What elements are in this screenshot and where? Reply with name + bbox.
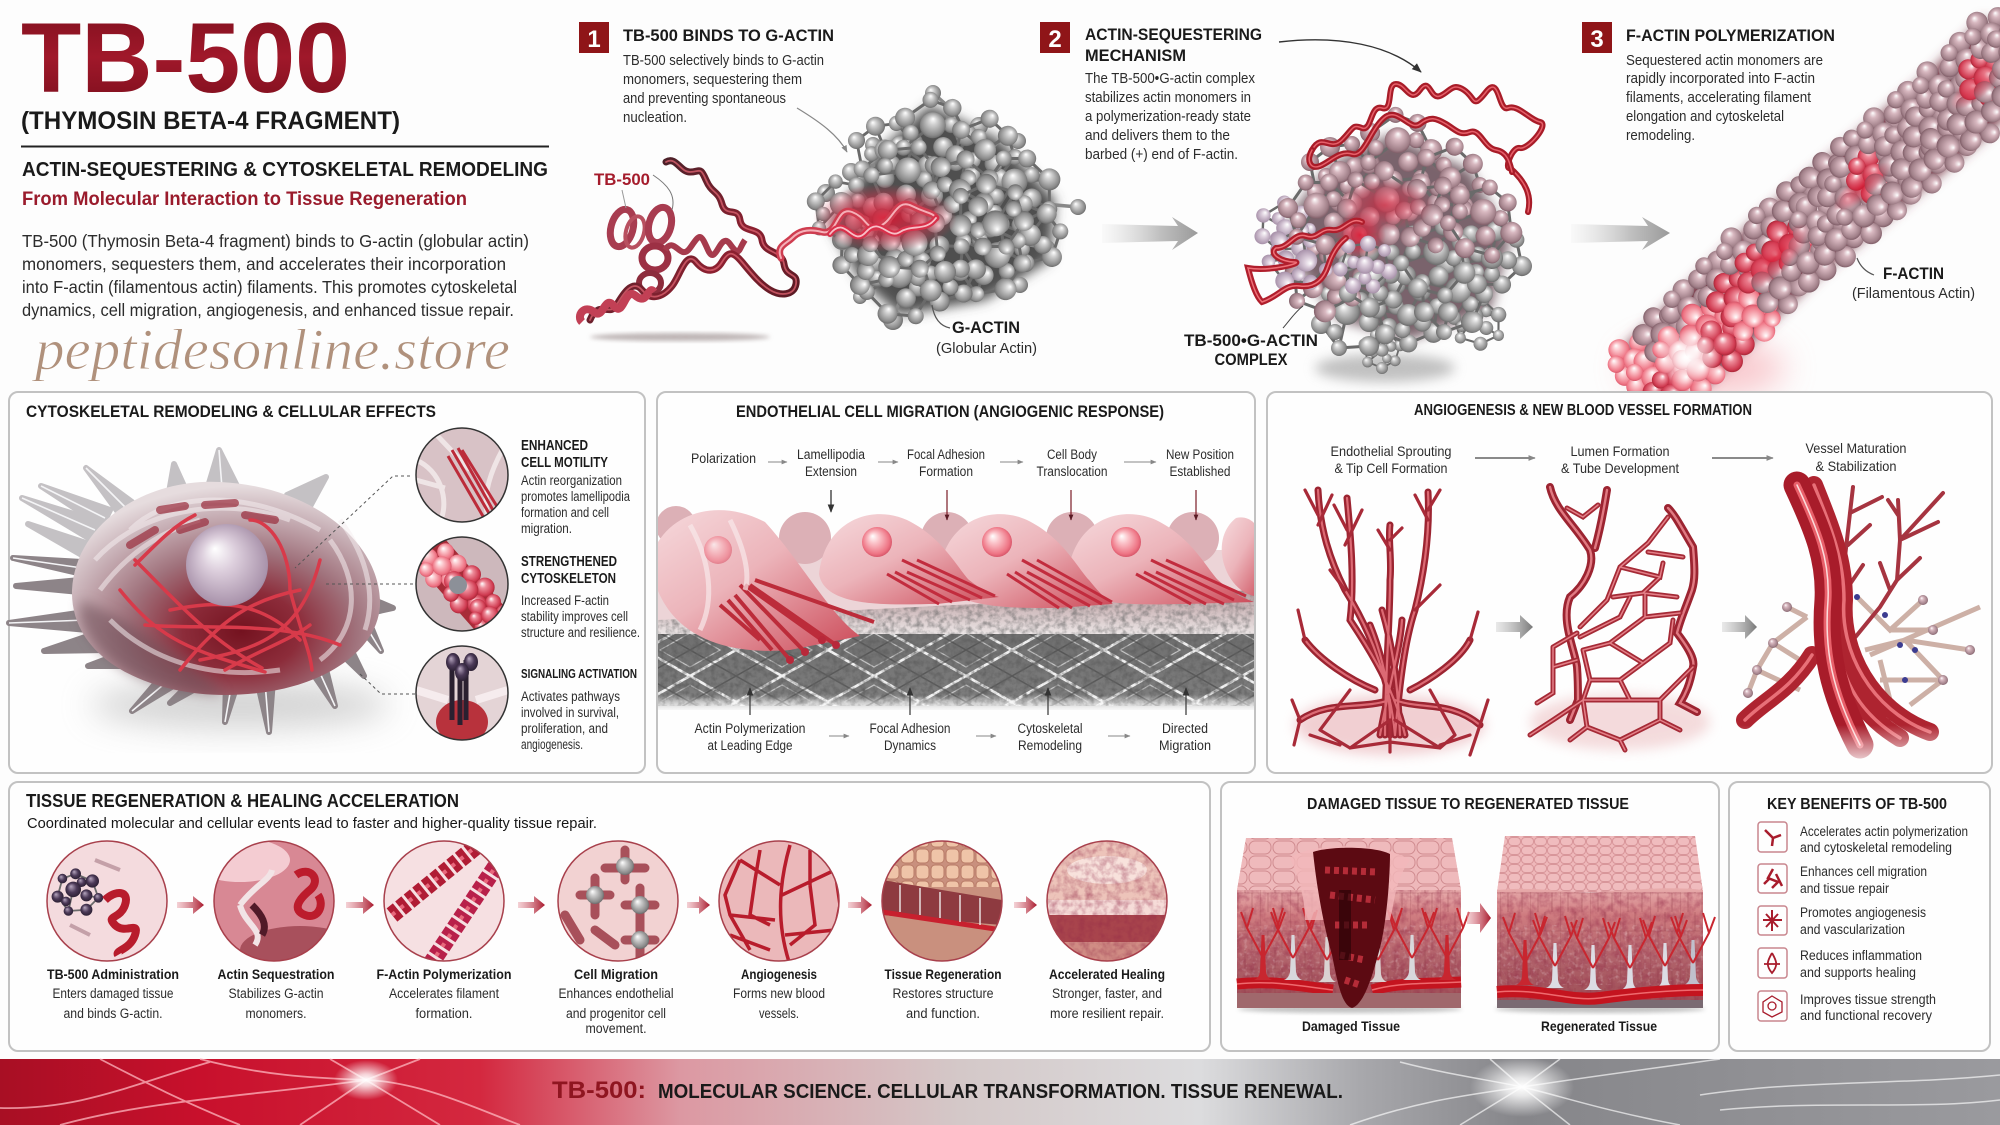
step 1 description: TB-500 selectively binds to G-actin: [623, 53, 824, 69]
step 2 description: a polymerization-ready state: [1085, 109, 1251, 125]
top step labels: Extension: [805, 464, 857, 479]
panel: key benefits: [1729, 782, 1990, 1051]
step 3 description: elongation and cytoskeletal: [1626, 109, 1784, 125]
F-actin label: (Filamentous Actin): [1852, 285, 1975, 302]
top step labels: New Position: [1166, 447, 1234, 462]
illustration: lumen formation: [1530, 487, 1710, 750]
intro paragraph: dynamics, cell migration, angiogenesis, and enhanced tissue repair.: [22, 300, 514, 320]
section heading: ACTIN-SEQUESTERING & CYTOSKELETAL REMODELING: [22, 159, 548, 181]
TB-500 label: TB-500: [594, 170, 650, 189]
top step labels: Lamellipodia: [797, 447, 865, 462]
step 5: angiogenesis: Angiogenesis: [741, 966, 817, 982]
TB-500 label: [594, 170, 673, 210]
illustration: cells on extracellular matrix: [650, 506, 1267, 714]
regenerated tissue block: [1495, 836, 1715, 1013]
complex label: [1184, 306, 1318, 369]
stage labels: & Stabilization: [1816, 458, 1896, 474]
top step labels: Established: [1170, 464, 1230, 479]
curved arrow to complex: [1279, 40, 1421, 72]
G-actin label: (Globular Actin): [936, 340, 1037, 357]
step 3: F-actin polymerization: [1582, 4, 2000, 433]
stage labels: & Tip Cell Formation: [1334, 460, 1448, 476]
intro paragraph: into F-actin (filamentous actin) filaments. This promotes cytoskeletal: [22, 277, 517, 297]
text: enhanced cell motility: migration.: [521, 521, 572, 536]
footer tagline: MOLECULAR SCIENCE. CELLULAR TRANSFORMATION. TISSUE RENEWAL.: [658, 1081, 1343, 1103]
arrows between steps: [177, 896, 1037, 914]
step 7: accelerated healing: [1047, 841, 1167, 1021]
step 1 description: monomers, sequestering them: [623, 72, 802, 88]
step 7: accelerated healing: Stronger, faster, and: [1052, 986, 1162, 1001]
nucleus: [186, 524, 268, 606]
text: strengthened cytoskeleton: [521, 554, 640, 640]
step 3 description: Sequestered actin monomers are: [1626, 53, 1823, 69]
top step labels: Focal Adhesion: [907, 447, 985, 462]
TB-500 peptide ribbon: [580, 161, 936, 322]
step 5: angiogenesis: vessels.: [759, 1006, 799, 1021]
text: signaling activation: involved in survival,: [521, 705, 619, 720]
step 2 description: and delivers them to the: [1085, 128, 1230, 144]
benefits list: Reduces inflammation: [1800, 948, 1922, 963]
panel subheading: Coordinated molecular and cellular events lead to faster and higher-quality tissue repair.: [27, 816, 597, 832]
step 1 description: nucleation.: [623, 110, 687, 126]
step number 2: [1040, 22, 1070, 53]
block captions: Damaged Tissue: [1302, 1018, 1400, 1034]
stage labels: [1330, 440, 1906, 476]
benefits list: and vascularization: [1800, 922, 1905, 937]
text: enhanced cell motility: Actin reorganization: [521, 473, 622, 488]
top step arrows: [768, 461, 1156, 463]
top step labels: Formation: [919, 464, 973, 479]
step 7: accelerated healing: Accelerated Healing: [1049, 966, 1165, 982]
up arrows: [750, 688, 1186, 715]
down arrows: [831, 490, 1196, 520]
icon: cell migration: [1758, 864, 1787, 893]
icon: tissue strength: [1758, 991, 1787, 1021]
benefits list: and supports healing: [1800, 965, 1916, 980]
panel: tissue regeneration & healing acceleration: [9, 782, 1210, 1051]
bottom step labels: Migration: [1159, 738, 1211, 753]
panel: damaged tissue to regenerated tissue: [1221, 782, 1719, 1051]
text: strengthened cytoskeleton: Increased F-actin: [521, 593, 609, 608]
step 1: TB-500 administration: [47, 841, 179, 1021]
starburst left: [334, 1060, 398, 1100]
step number 3: 3: [1590, 26, 1604, 53]
G-actin molecule: [794, 75, 1086, 342]
step 3 description: filaments, accelerating filament: [1626, 90, 1811, 106]
top step labels: [691, 447, 1234, 479]
step 1 description: and preventing spontaneous: [623, 91, 786, 107]
text: signaling activation: Activates pathways: [521, 689, 620, 704]
arrow: step 1 to 2: [1102, 217, 1198, 250]
F-actin label: F-ACTIN: [1883, 264, 1944, 283]
inset: cell motility: [416, 428, 508, 522]
arrows between stages: [1496, 615, 1757, 639]
footer tagline: [552, 1077, 1343, 1104]
step 6: tissue regeneration: and function.: [906, 1006, 980, 1021]
step 3: F-actin polymerization: [376, 841, 512, 1021]
text: enhanced cell motility: [521, 438, 630, 536]
step 2: actin sequestration: Actin Sequestration: [218, 966, 334, 982]
benefits list: Promotes angiogenesis: [1800, 905, 1926, 920]
text: signaling activation: SIGNALING ACTIVATION: [521, 666, 637, 681]
leader lines: [295, 476, 415, 694]
step 6: tissue regeneration: [882, 841, 1002, 1021]
arrow: damaged to regenerated: [1467, 903, 1491, 933]
watermark: peptidesonline.store: [31, 317, 510, 382]
intro paragraph: monomers, sequesters them, and accelerates their incorporation: [22, 254, 506, 274]
panel heading: ENDOTHELIAL CELL MIGRATION (ANGIOGENIC RESPONSE): [736, 402, 1164, 421]
title: TB-500: [21, 2, 350, 113]
benefits list: Enhances cell migration: [1800, 864, 1927, 879]
complex shadow: [1315, 354, 1455, 382]
F-actin label: [1852, 258, 1975, 302]
stage labels: Endothelial Sprouting: [1330, 443, 1452, 459]
bottom step labels: Actin Polymerization: [694, 721, 806, 736]
text: strengthened cytoskeleton: STRENGTHENED: [521, 554, 617, 570]
G-actin label: [932, 305, 1037, 357]
subtitle: (THYMOSIN BETA-4 FRAGMENT): [21, 107, 400, 135]
title block: [21, 2, 549, 382]
step 1: TB-500 administration: and binds G-actin.: [64, 1006, 162, 1021]
text: enhanced cell motility: promotes lamellipodia: [521, 489, 630, 504]
panel heading: TISSUE REGENERATION & HEALING ACCELERATION: [26, 791, 459, 811]
panel heading: DAMAGED TISSUE TO REGENERATED TISSUE: [1307, 796, 1629, 813]
tagline: From Molecular Interaction to Tissue Regeneration: [22, 188, 467, 210]
bottom step labels: Remodeling: [1018, 738, 1082, 753]
complex ribbon: [1248, 84, 1543, 302]
block captions: Regenerated Tissue: [1541, 1018, 1657, 1034]
benefits list: and cytoskeletal remodeling: [1800, 840, 1952, 855]
bottom step labels: Directed: [1162, 721, 1208, 736]
step 2: actin sequestration: [213, 840, 335, 1018]
text: signaling activation: angiogenesis.: [521, 737, 583, 752]
step 4: cell migration: and progenitor cell: [566, 1006, 666, 1021]
top step labels: Translocation: [1036, 464, 1108, 479]
damaged tissue block: [1237, 838, 1469, 1013]
bottom step arrows: [829, 735, 1130, 737]
F-actin filament: [1608, 4, 2000, 433]
step 5: angiogenesis: Forms new blood: [733, 986, 825, 1001]
step 1: TB-500 administration: Enters damaged tissue: [52, 986, 174, 1001]
intro paragraph: TB-500 (Thymosin Beta-4 fragment) binds to G-actin (globular actin): [22, 231, 529, 251]
text: strengthened cytoskeleton: structure and resilience.: [521, 625, 640, 640]
step 4: cell migration: [558, 841, 678, 1036]
benefits list: Accelerates actin polymerization: [1800, 824, 1968, 839]
panel: angiogenesis & new blood vessel formation: [1267, 392, 1992, 773]
text: enhanced cell motility: ENHANCED: [521, 438, 588, 454]
step number 2: 2: [1048, 26, 1062, 53]
complex label: COMPLEX: [1214, 350, 1288, 369]
benefits list: and functional recovery: [1800, 1008, 1932, 1023]
text: strengthened cytoskeleton: stability improves cell: [521, 609, 628, 624]
text: signaling activation: proliferation, and: [521, 721, 608, 736]
step 2 heading: [1085, 25, 1262, 65]
step 4: cell migration: Cell Migration: [574, 966, 658, 982]
text: strengthened cytoskeleton: CYTOSKELETON: [521, 571, 616, 587]
illustration: endothelial sprouting: [1292, 490, 1488, 755]
illustration: cell with actin network: [9, 450, 393, 732]
top step labels: Polarization: [691, 451, 756, 466]
bottom step labels: at Leading Edge: [708, 738, 792, 753]
intro paragraph: [22, 231, 529, 320]
step 4: cell migration: movement.: [586, 1021, 646, 1036]
step 3 description: [1626, 53, 1823, 144]
step 3: F-actin polymerization: F-Actin Polymerization: [376, 966, 512, 982]
bottom step labels: [694, 721, 1211, 753]
step 4: cell migration: Enhances endothelial: [558, 986, 674, 1001]
bottom step labels: Cytoskeletal: [1018, 721, 1082, 736]
complex label: TB-500•G-ACTIN: [1184, 331, 1318, 350]
peptide shadow: [590, 333, 770, 341]
step 2 description: barbed (+) end of F-actin.: [1085, 147, 1238, 163]
text: enhanced cell motility: formation and cell: [521, 505, 609, 520]
step 2 heading: ACTIN-SEQUESTERING: [1085, 25, 1262, 44]
step 1 heading: TB-500 BINDS TO G-ACTIN: [623, 26, 834, 45]
step 3: F-actin polymerization: formation.: [416, 1006, 472, 1021]
benefits list: and tissue repair: [1800, 881, 1889, 896]
panel heading: CYTOSKELETAL REMODELING & CELLULAR EFFECTS: [26, 402, 436, 421]
stage labels: Lumen Formation: [1570, 443, 1670, 459]
step number 1: [579, 22, 609, 53]
bottom step labels: Dynamics: [884, 738, 936, 753]
step 5: angiogenesis: [719, 841, 840, 1021]
panel: cytoskeletal remodeling & cellular effects: [9, 392, 645, 773]
stage arrows: [1475, 457, 1773, 459]
step 6: tissue regeneration: Tissue Regeneration: [884, 966, 1002, 982]
footer tagline: TB-500:: [552, 1077, 646, 1104]
step 3 description: remodeling.: [1626, 128, 1695, 144]
step 3: F-actin polymerization: Accelerates filament: [389, 986, 499, 1001]
step 2 description: stabilizes actin monomers in: [1085, 90, 1251, 106]
benefits list: Improves tissue strength: [1800, 992, 1936, 1007]
block captions: [1302, 1018, 1657, 1034]
text: signaling activation: [521, 666, 637, 752]
step 2: actin-sequestering mechanism: [1040, 22, 1670, 382]
step 2 description: [1085, 71, 1256, 163]
text: enhanced cell motility: CELL MOTILITY: [521, 455, 608, 471]
panel heading: KEY BENEFITS OF TB-500: [1767, 796, 1947, 813]
panel: endothelial cell migration: [650, 392, 1267, 773]
illustration: vessel maturation: [1725, 485, 1980, 770]
inset: strengthened cytoskeleton: [416, 537, 513, 635]
step number 3: [1582, 22, 1612, 53]
icon: reduced inflammation: [1758, 948, 1787, 978]
benefits list: [1800, 824, 1968, 1023]
step number 1: 1: [587, 26, 601, 53]
step 2 description: The TB-500•G-actin complex: [1085, 71, 1256, 87]
stage labels: & Tube Development: [1561, 460, 1679, 476]
step 1: TB-500 administration: TB-500 Administration: [47, 966, 179, 982]
icon: angiogenesis: [1758, 906, 1787, 935]
bottom step labels: Focal Adhesion: [870, 721, 950, 736]
step 2: actin sequestration: Stabilizes G-actin: [228, 986, 324, 1001]
top step labels: Cell Body: [1047, 447, 1097, 462]
G-actin label: G-ACTIN: [952, 318, 1020, 337]
panel heading: ANGIOGENESIS & NEW BLOOD VESSEL FORMATION: [1414, 402, 1752, 419]
step 1 description: [623, 53, 824, 126]
step 2 heading: MECHANISM: [1085, 46, 1186, 65]
step 6: tissue regeneration: Restores structure: [892, 986, 994, 1001]
starburst right: [1470, 1057, 1574, 1117]
step 2: actin sequestration: monomers.: [246, 1006, 306, 1021]
step 3 description: rapidly incorporated into F-actin: [1626, 71, 1815, 87]
step 3 heading: F-ACTIN POLYMERIZATION: [1626, 26, 1835, 45]
TB-500 G-actin complex molecule: [1244, 90, 1545, 374]
arrow: step 2 to 3: [1571, 217, 1670, 250]
arrow to G-actin: [797, 108, 847, 152]
stage labels: Vessel Maturation: [1806, 440, 1906, 456]
inset: signaling activation: [416, 646, 508, 744]
step 7: accelerated healing: more resilient repair.: [1050, 1006, 1164, 1021]
step 1: TB-500 binds to G-actin: [579, 22, 1198, 357]
footer banner: [0, 1057, 2000, 1125]
icon: actin polymerization: [1758, 822, 1787, 852]
